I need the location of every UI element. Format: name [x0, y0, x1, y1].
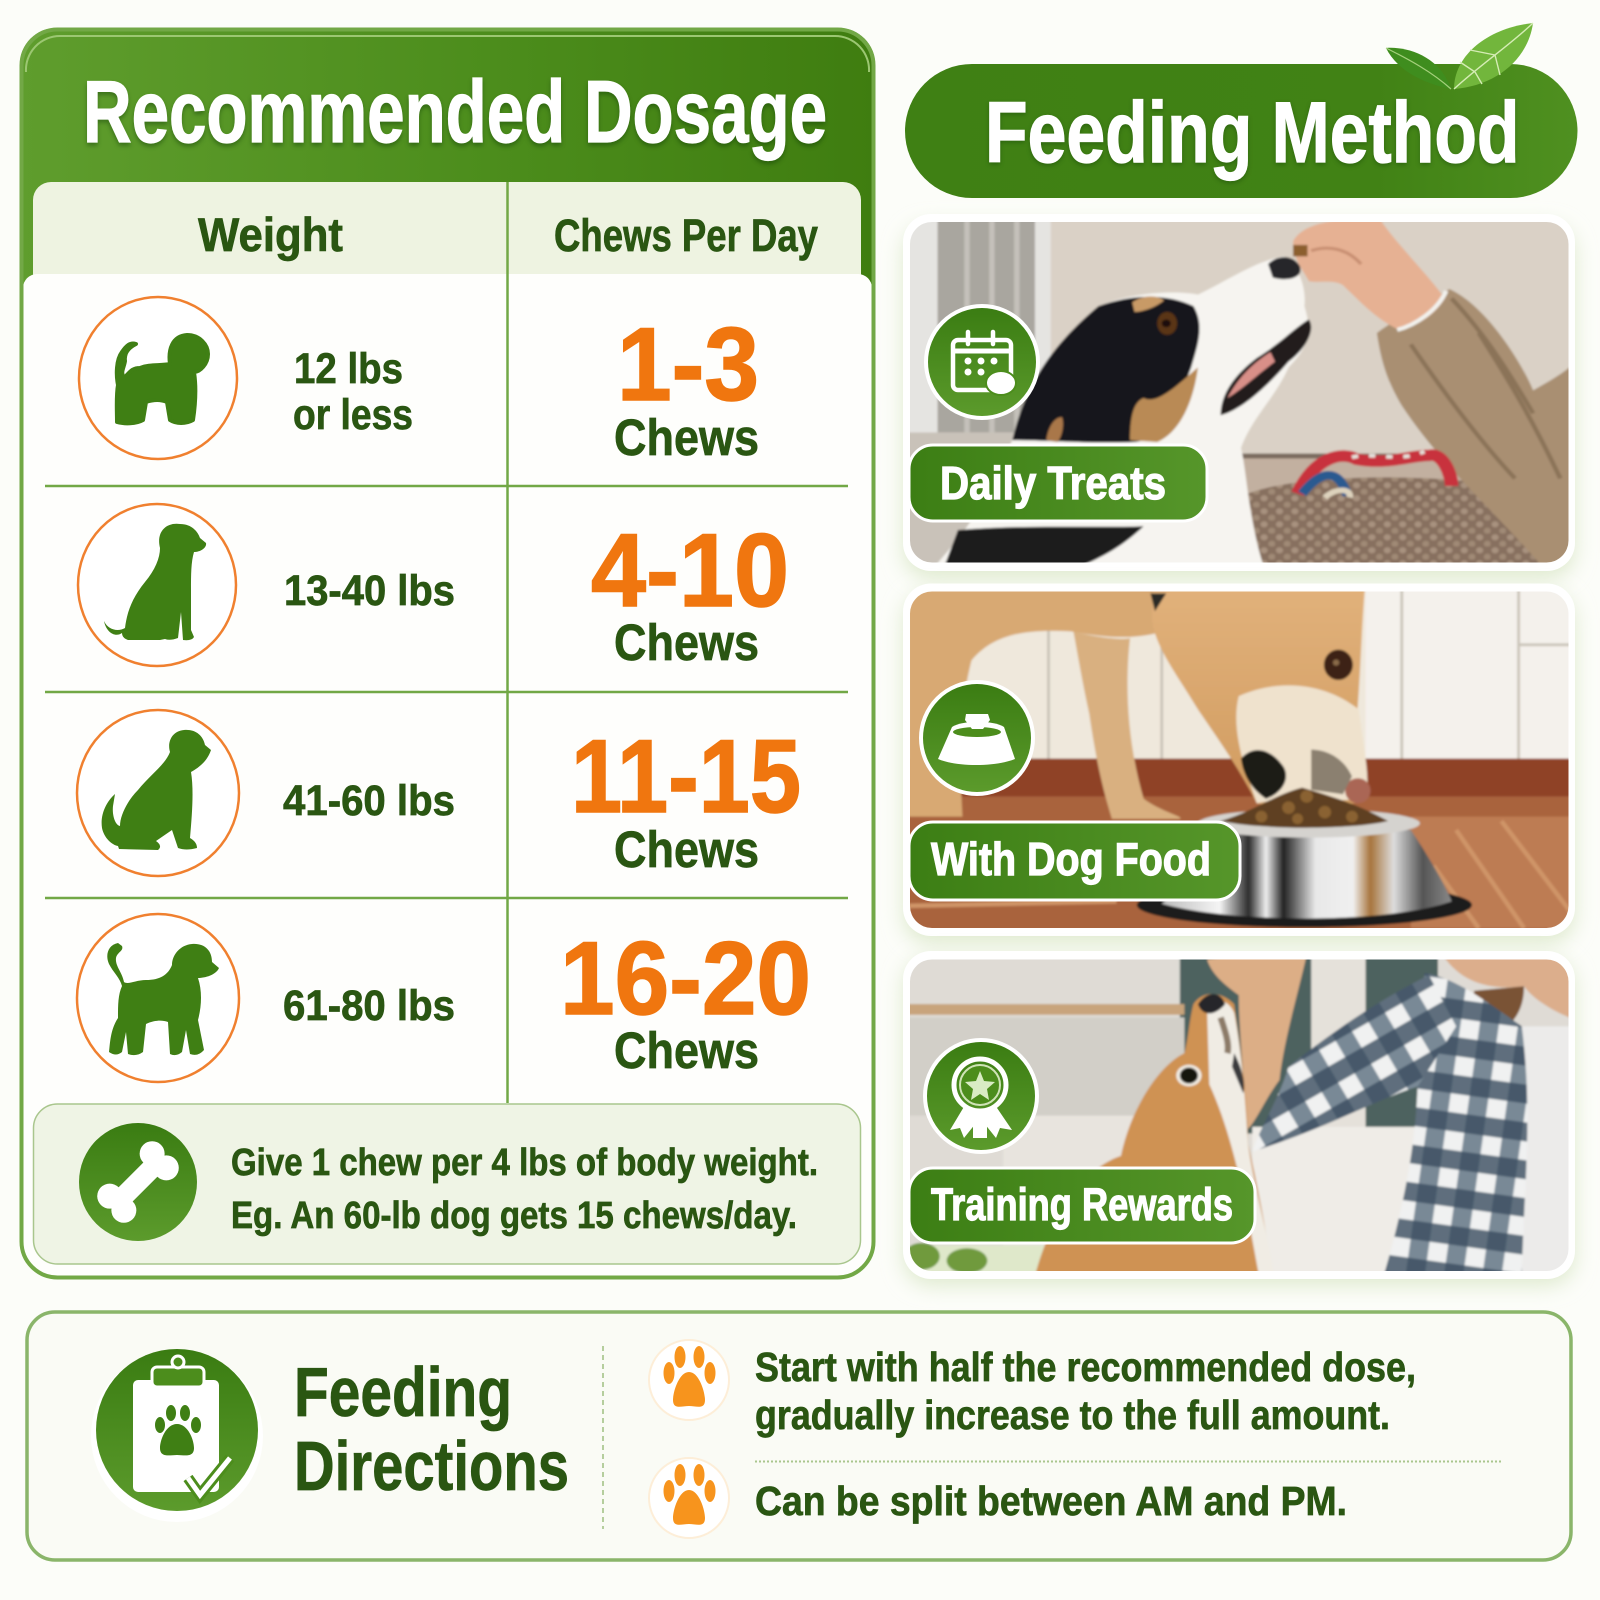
direction text: gradually increase to the full amount.	[755, 1392, 1390, 1438]
photo: training a dog with a treat	[890, 955, 1597, 1276]
photo card: daily treats	[890, 214, 1600, 579]
weight text: 13-40 lbs: 13-40 lbs	[284, 567, 455, 615]
icon: standing poodle	[77, 914, 239, 1082]
dose: 11-15 chews: 11-15	[571, 719, 801, 835]
icon: leaves	[1386, 23, 1533, 89]
label: daily treats	[909, 445, 1207, 521]
dose: 1-3 chews	[614, 307, 759, 466]
direction text: Can be split between AM and PM.	[755, 1478, 1347, 1524]
direction text	[755, 1344, 1416, 1438]
row: 12 lbs or less	[79, 297, 759, 466]
callout text: Eg. An 60-lb dog gets 15 chews/day.	[231, 1195, 797, 1237]
dose: 11-15 chews: Chews	[614, 821, 759, 878]
dose: 1-3 chews: 1-3	[617, 307, 759, 423]
icon: clipboard with paw and check	[91, 1349, 263, 1522]
row: 61-80 lbs	[77, 914, 811, 1082]
dose: 16-20 chews: 16-20	[560, 921, 811, 1037]
weight text: 12 lbs or less: 12 lbs	[294, 345, 403, 393]
weight text: 61-80 lbs: 61-80 lbs	[283, 982, 455, 1030]
direction text: Start with half the recommended dose,	[755, 1344, 1416, 1390]
row: 41-60 lbs	[77, 710, 801, 878]
label: daily treats: Daily Treats	[940, 457, 1166, 509]
icon: small fluffy dog	[79, 297, 237, 459]
photo card: with dog food	[890, 580, 1597, 944]
heading: feeding directions: Directions	[294, 1427, 569, 1505]
photo: dog eating from bowl	[910, 592, 1568, 928]
icon: sitting dog	[78, 504, 236, 666]
table body background	[23, 274, 872, 1276]
dose: 1-3 chews: Chews	[614, 409, 759, 466]
row: 13-40 lbs	[78, 504, 789, 671]
direction: split dose	[649, 1458, 1347, 1538]
callout text: Give 1 chew per 4 lbs of body weight.	[231, 1142, 818, 1184]
panel: feeding directions	[27, 1312, 1571, 1560]
heading: feeding directions: Feeding	[294, 1353, 512, 1431]
column heading: chews per day: Chews Per Day	[554, 210, 818, 261]
dose: 4-10 chews: Chews	[614, 614, 759, 671]
title: recommended dosage: Recommended Dosage	[83, 62, 827, 161]
callout text	[231, 1142, 818, 1237]
label: training rewards: Training Rewards	[931, 1179, 1233, 1230]
heading: feeding method	[905, 23, 1578, 198]
icon: calendar	[926, 306, 1038, 418]
label: with dog food	[909, 822, 1240, 900]
weight text: 12 lbs or less	[293, 345, 413, 439]
icon: bone	[79, 1123, 197, 1241]
heading: feeding directions	[294, 1353, 569, 1505]
weight text: 12 lbs or less: or less	[293, 391, 413, 439]
photo card: training rewards	[890, 951, 1597, 1286]
icon: orange paw	[649, 1458, 729, 1538]
column heading: weight: Weight	[198, 208, 343, 261]
icon: food bowl	[921, 682, 1033, 794]
callout: dose rule	[34, 1104, 860, 1264]
panel: recommended dosage	[20, 28, 875, 1279]
table header row	[33, 182, 861, 292]
dose: 16-20 chews: Chews	[614, 1022, 759, 1079]
direction: half dose	[649, 1340, 1416, 1438]
dose: 11-15 chews	[571, 719, 801, 878]
label: with dog food: With Dog Food	[931, 833, 1211, 885]
photo: dog taking a treat	[910, 222, 1568, 562]
label: training rewards	[909, 1168, 1255, 1243]
weight text: 41-60 lbs: 41-60 lbs	[283, 777, 455, 825]
icon: award ribbon	[925, 1040, 1037, 1152]
icon: sitting dog with collar	[77, 710, 239, 876]
icon: orange paw	[649, 1340, 729, 1420]
dose: 4-10 chews: 4-10	[591, 513, 789, 629]
